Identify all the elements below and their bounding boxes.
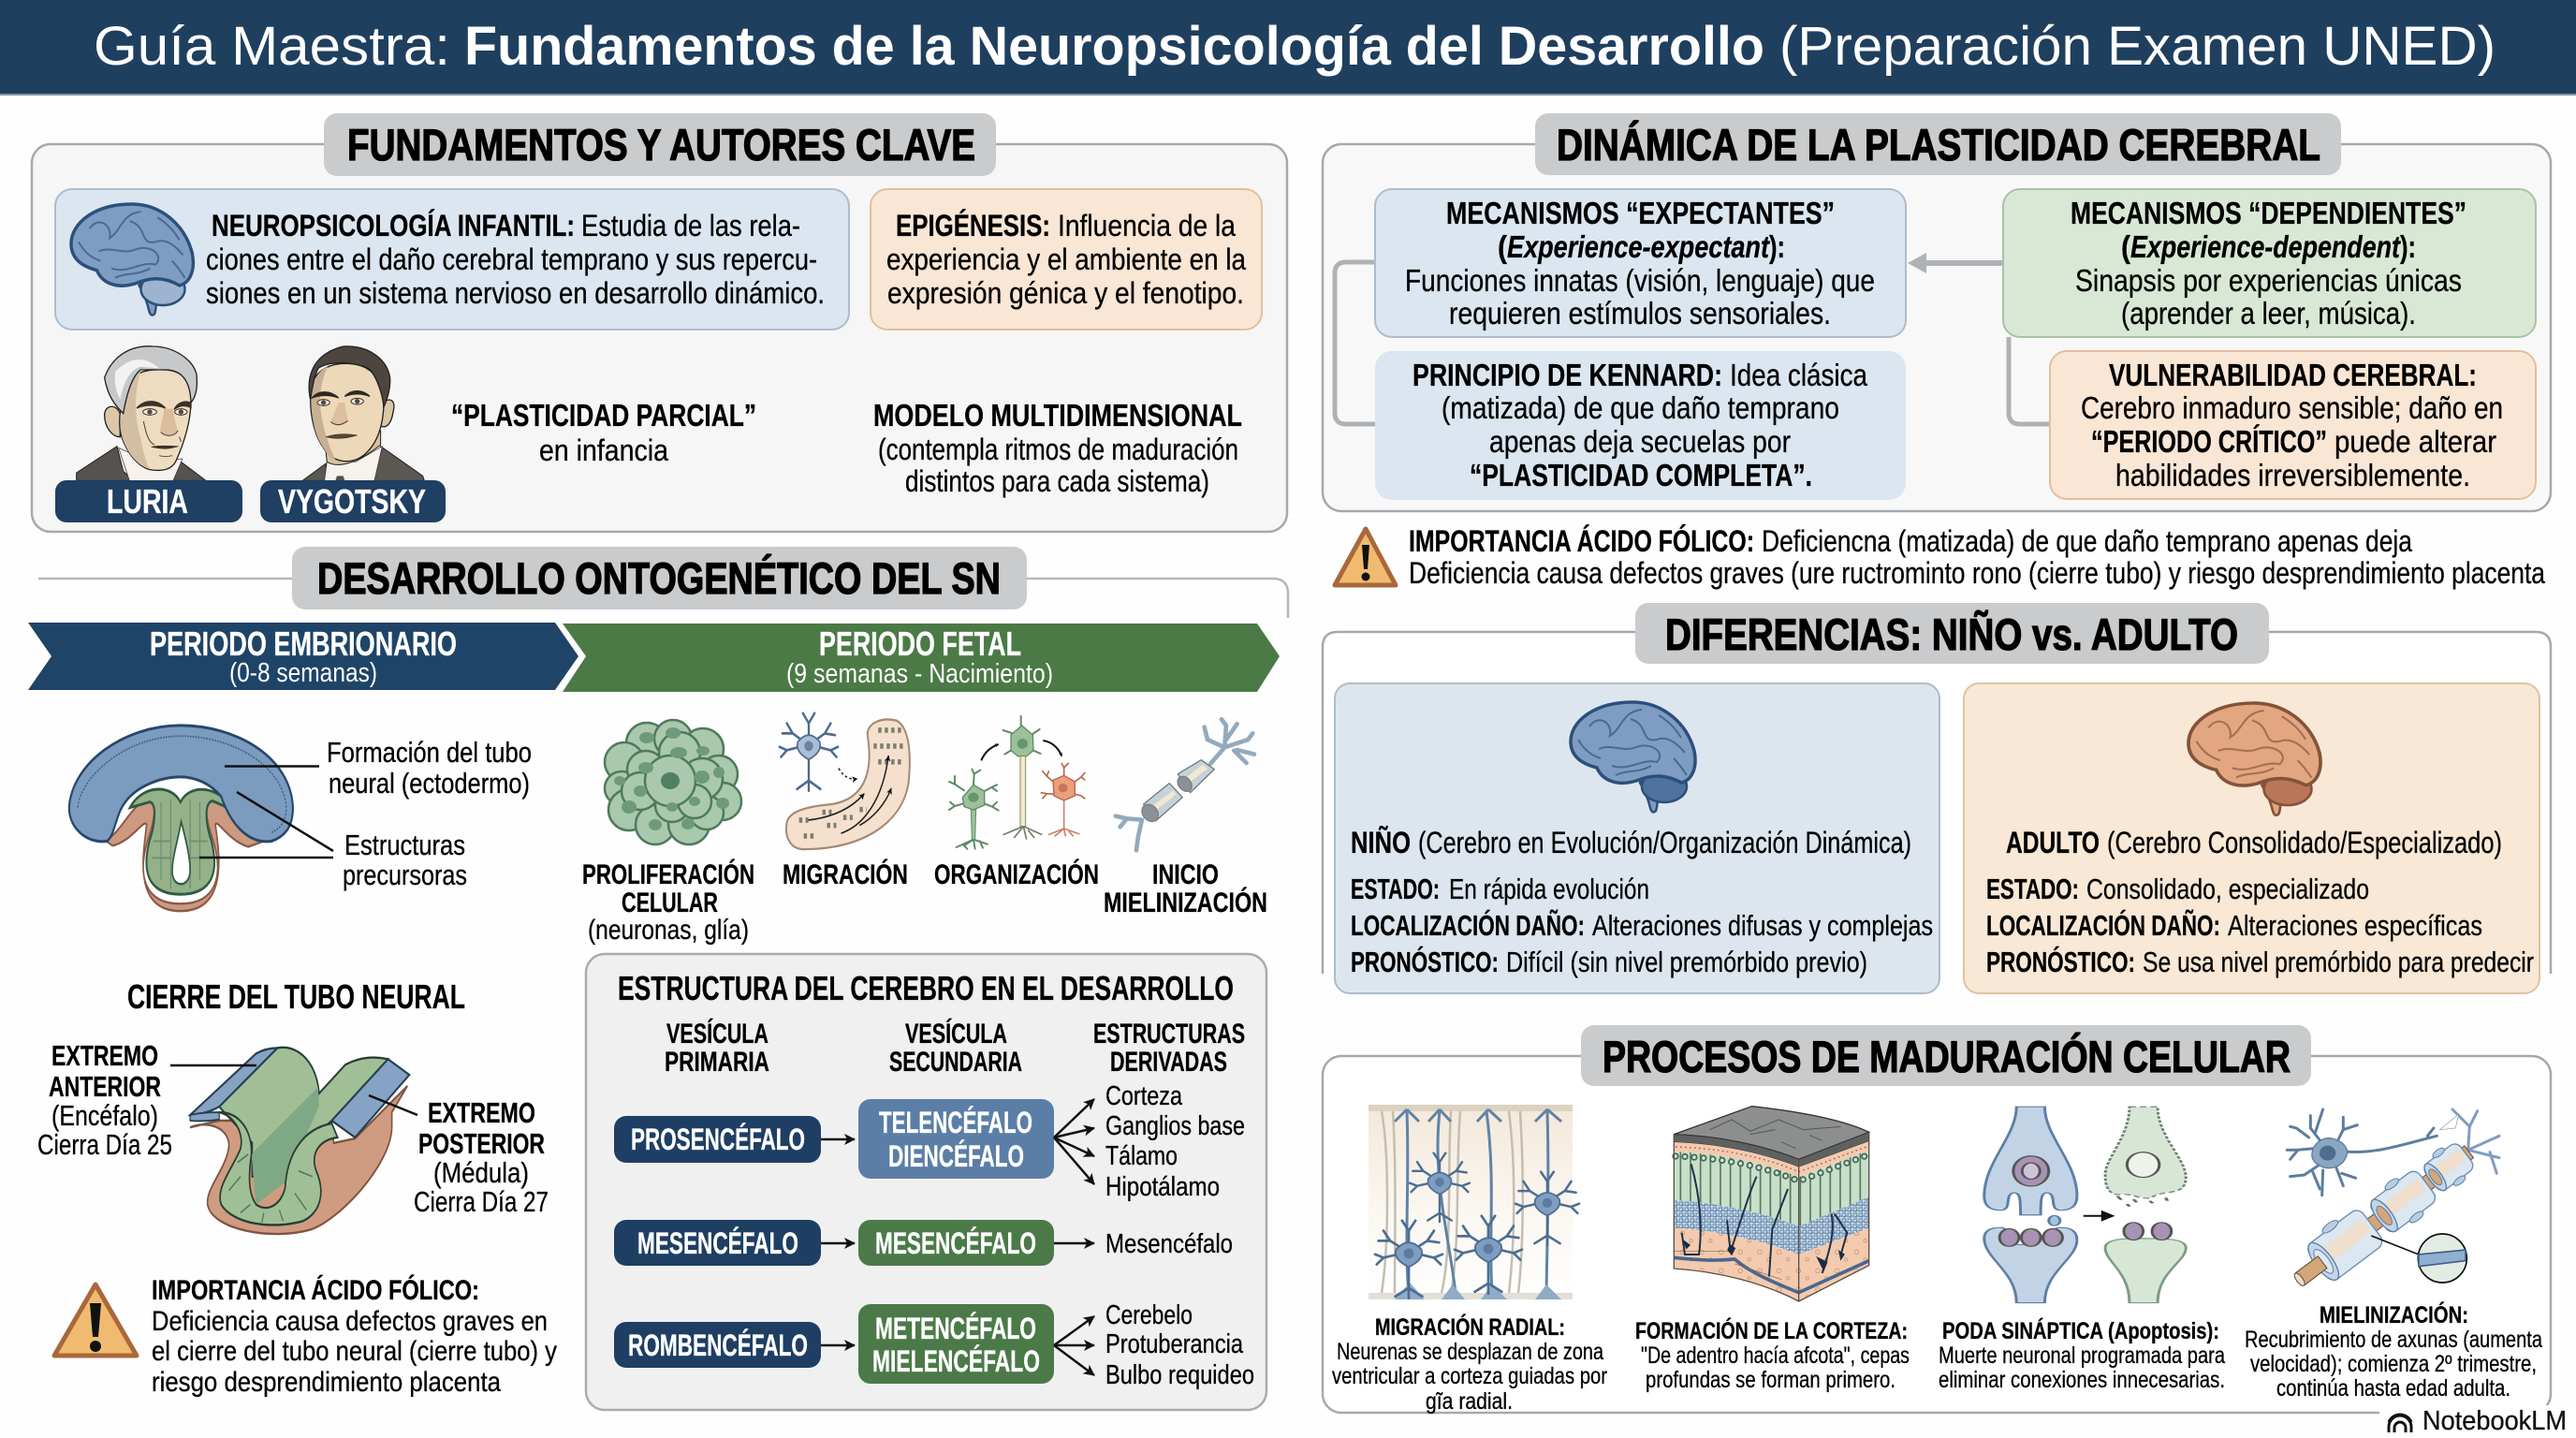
text: extremo anterior: ANTERIOR	[49, 1070, 161, 1103]
text: extremo posterior: (Médula)	[433, 1156, 529, 1189]
text: migración radial: ventricular a corteza guiadas por	[1332, 1363, 1607, 1389]
text: migración radial: MIGRACIÓN RADIAL:	[1375, 1313, 1565, 1341]
row: mesencéfalo: MESENCÉFALO	[875, 1226, 1036, 1260]
connector: dependientes a vulnerabilidad	[2009, 337, 2050, 424]
card: principio de Kennard: Idea clásica	[1730, 358, 1868, 392]
heading: diferencias: DIFERENCIAS: NIÑO vs. ADULTO	[1665, 609, 2238, 659]
card: mecanismos expectantes: Funciones innatas (visión, lenguaje) que	[1405, 263, 1875, 298]
column headers: VESÍCULA	[666, 1018, 768, 1049]
connector: bracket izquierdo	[1335, 262, 1375, 424]
card: epigénesis: experiencia y el ambiente en la	[886, 242, 1246, 276]
panel: estructura del cerebro en el desarrollo	[586, 954, 1266, 1410]
text: extremo posterior	[414, 1096, 549, 1218]
text: plasticidad parcial	[451, 398, 756, 467]
illustration: formación del tubo neural	[69, 726, 333, 911]
icon: brain niño	[1571, 702, 1695, 812]
text: niño	[1351, 826, 1933, 978]
text: adulto: ESTADO:	[1986, 873, 2079, 905]
card: mecanismos dependientes: (	[2121, 229, 2130, 264]
panel: procesos de maduración celular	[1323, 1025, 2551, 1415]
text: formación del tubo neural: Formación del tubo	[327, 736, 532, 769]
text: migración radial: Neurenas se desplazan de zona	[1337, 1339, 1603, 1365]
row: mesencéfalo: Mesencéfalo	[1105, 1229, 1233, 1259]
column headers: SECUNDARIA	[889, 1047, 1022, 1078]
illustration: mielinización	[2280, 1109, 2499, 1300]
text: definición neuropsicología infantil: NEUROPSICOLOGÍA INFANTIL:	[212, 209, 575, 242]
row: prosencéfalo: Ganglios base	[1105, 1111, 1245, 1141]
card: vulnerabilidad cerebral: Cerebro inmaduro sensible; daño en	[2081, 390, 2503, 425]
card: mecanismos expectantes: requieren estímulos sensoriales.	[1449, 296, 1831, 330]
text: formación de la corteza: FORMACIÓN DE LA CORTEZA:	[1635, 1316, 1908, 1344]
row: prosencéfalo: Hipotálamo	[1105, 1172, 1220, 1202]
row: prosencéfalo: DIENCÉFALO	[888, 1139, 1024, 1173]
panel: dinámica de la plasticidad cerebral	[1323, 113, 2551, 511]
card: principio de Kennard: PRINCIPIO DE KENNARD:	[1412, 358, 1722, 392]
text: extremo posterior: EXTREMO	[428, 1096, 535, 1129]
text: poda sináptica: PODA SINÁPTICA (Apoptosis):	[1942, 1317, 2219, 1344]
card: mecanismos dependientes: Sinapsis por experiencias únicas	[2075, 263, 2462, 298]
card: mecanismos dependientes: ):	[2400, 229, 2416, 264]
heading: cierre del tubo neural: CIERRE DEL TUBO NEURAL	[127, 977, 465, 1016]
text: formación de la corteza: "De adentro hacía afcota", cepas	[1641, 1343, 1910, 1369]
illustration: migración radial	[1368, 1105, 1579, 1299]
text: definición neuropsicología infantil: Estudia de las rela-	[581, 209, 800, 242]
heading: procesos: PROCESOS DE MADURACIÓN CELULAR	[1603, 1032, 2291, 1081]
row: rombencéfalo	[614, 1300, 1254, 1390]
label: Luria: LURIA	[107, 482, 188, 521]
row: mesencéfalo: MESENCÉFALO	[637, 1226, 798, 1260]
card: vulnerabilidad cerebral: “PERIODO CRÍTICO”	[2091, 424, 2327, 459]
icon: migración	[780, 713, 910, 849]
row: rombencéfalo: ROMBENCÉFALO	[628, 1328, 808, 1362]
text: formación de la corteza	[1635, 1316, 1910, 1393]
portrait: Vygotsky	[302, 346, 424, 480]
column headers	[665, 1018, 1245, 1078]
label: Luria	[55, 480, 242, 522]
text: niño: Difícil (sin nivel premórbido previo)	[1506, 946, 1867, 978]
labels: procesos del periodo fetal: CELULAR	[622, 888, 718, 918]
text: niño: PRONÓSTICO:	[1351, 945, 1499, 978]
text: modelo multidimensional: (contempla ritmos de maduración	[878, 433, 1238, 466]
text: adulto: ADULTO	[2006, 826, 2100, 859]
title banner: (Preparación Examen UNED)	[1779, 16, 2496, 77]
row: prosencéfalo: PROSENCÉFALO	[631, 1123, 805, 1156]
portrait: Luria	[77, 346, 206, 480]
panel: desarrollo ontogenético	[28, 547, 1288, 1410]
card: mecanismos dependientes: (aprender a leer, música).	[2121, 296, 2416, 330]
text: poda sináptica: Muerte neuronal programada para	[1939, 1343, 2225, 1369]
row: rombencéfalo: METENCÉFALO	[875, 1312, 1036, 1345]
card: principio de Kennard: “PLASTICIDAD COMPLETA”.	[1470, 458, 1812, 492]
title banner: Fundamentos de la Neuropsicología del Desarrollo	[464, 16, 1764, 77]
row: prosencéfalo: Tálamo	[1105, 1141, 1178, 1171]
card: epigénesis: Influencia de la	[1058, 209, 1236, 242]
title banner	[0, 0, 2576, 95]
heading: dinámica	[1535, 113, 2341, 175]
banner: periodo fetal: PERIODO FETAL	[819, 624, 1021, 663]
text: estructuras precursoras: precursoras	[343, 858, 467, 891]
card: principio de Kennard: (matizada) de que daño temprano	[1442, 390, 1839, 425]
card: mecanismos expectantes: (	[1498, 229, 1507, 264]
callout: importancia ácido fólico (derecha)	[1335, 524, 2545, 590]
text: definición neuropsicología infantil: ciones entre el daño cerebral temprano y sus repercu-	[206, 242, 817, 276]
heading: fundamentos	[324, 113, 996, 176]
callout: importancia ácido fólico (derecha): IMPORTANCIA ÁCIDO FÓLICO:	[1409, 524, 1754, 558]
banner: periodo embrionario: (0-8 semanas)	[229, 658, 377, 688]
text: formación del tubo neural: neural (ectodermo)	[329, 767, 530, 800]
illustration: formación de la corteza	[1674, 1107, 1869, 1301]
icon: warning triangle	[54, 1284, 137, 1356]
text: niño: LOCALIZACIÓN DAÑO:	[1351, 908, 1585, 942]
card: mecanismos dependientes: MECANISMOS “DEPENDIENTES”	[2071, 196, 2466, 230]
text: extremo anterior	[37, 1039, 172, 1161]
text: modelo multidimensional: MODELO MULTIDIMENSIONAL	[873, 398, 1242, 433]
labels: procesos del periodo fetal: PROLIFERACIÓN	[582, 858, 754, 890]
card: principio de Kennard	[1375, 351, 1906, 500]
text: niño: ESTADO:	[1351, 873, 1440, 905]
card: epigénesis	[871, 189, 1262, 330]
icon: blue brain	[71, 204, 193, 315]
text: plasticidad parcial: “PLASTICIDAD PARCIAL”	[451, 398, 756, 433]
text: importancia ácido fólico (izquierda): riesgo desprendimiento placenta	[152, 1367, 501, 1398]
column headers: PRIMARIA	[665, 1047, 769, 1078]
row: prosencéfalo	[614, 1081, 1245, 1202]
heading: desarrollo ontogenético	[292, 547, 1027, 609]
labels: procesos del periodo fetal: INICIO	[1152, 859, 1219, 890]
text: poda sináptica	[1939, 1317, 2225, 1393]
text: estructuras precursoras: Estructuras	[344, 829, 465, 861]
column headers: ESTRUCTURAS	[1093, 1019, 1245, 1049]
heading: dinámica: DINÁMICA DE LA PLASTICIDAD CEREBRAL	[1557, 120, 2320, 169]
heading: estructura del cerebro: ESTRUCTURA DEL CEREBRO EN EL DESARROLLO	[618, 969, 1234, 1007]
labels: procesos del periodo fetal: (neuronas, glía)	[588, 915, 749, 946]
text: importancia ácido fólico (izquierda): IMPORTANCIA ÁCIDO FÓLICO:	[152, 1274, 479, 1306]
text: migración radial	[1332, 1313, 1607, 1415]
text: mielinización: continúa hasta edad adulta.	[2276, 1375, 2510, 1401]
row: rombencéfalo: Cerebelo	[1105, 1300, 1193, 1330]
text: mielinización	[2245, 1300, 2542, 1401]
title banner: Guía Maestra:	[94, 16, 450, 77]
column headers: VESÍCULA	[905, 1018, 1007, 1049]
label: Vygotsky: VYGOTSKY	[278, 482, 426, 521]
card: epigénesis: EPIGÉNESIS:	[896, 209, 1050, 242]
text: importancia ácido fólico (izquierda): el cierre del tubo neural (cierre tubo) y	[152, 1336, 557, 1367]
card: mecanismos expectantes: MECANISMOS “EXPECTANTES”	[1446, 196, 1835, 230]
icon: organización	[949, 716, 1085, 849]
row: rombencéfalo: Protuberancia	[1105, 1329, 1244, 1359]
text: modelo multidimensional	[873, 398, 1242, 498]
text: estructuras precursoras	[343, 829, 467, 891]
text: extremo anterior: EXTREMO	[51, 1039, 158, 1072]
banner: periodo embrionario: PERIODO EMBRIONARIO	[150, 624, 457, 663]
illustration: poda sináptica	[1984, 1107, 2186, 1303]
card: mecanismos dependientes: Experience-dependent	[2130, 229, 2402, 264]
text: niño: En rápida evolución	[1449, 873, 1649, 905]
illustration: cierre del tubo neural	[170, 1048, 417, 1234]
text: niño: (Cerebro en Evolución/Organización Dinámica)	[1418, 826, 1911, 859]
text: extremo posterior: Cierra Día 27	[414, 1185, 549, 1218]
heading: procesos	[1581, 1025, 2311, 1086]
card: vulnerabilidad cerebral: puede alterar	[2334, 424, 2496, 459]
labels: procesos del periodo fetal: MIGRACIÓN	[783, 858, 908, 890]
text: plasticidad parcial: en infancia	[539, 433, 668, 467]
card: vulnerabilidad cerebral: habilidades irreversiblemente.	[2115, 458, 2470, 492]
row: mesencéfalo	[614, 1220, 1233, 1266]
text: extremo posterior: POSTERIOR	[418, 1127, 545, 1160]
icon: warning triangle	[1335, 529, 1396, 585]
callout: importancia ácido fólico (derecha): Deficiencna (matizada) de que daño temprano apenas deja	[1762, 524, 2412, 558]
row: rombencéfalo: MIELENCÉFALO	[872, 1344, 1040, 1378]
heading: diferencias	[1635, 603, 2269, 664]
text: extremo anterior: Cierra Día 25	[37, 1128, 172, 1161]
card: adulto	[1964, 683, 2539, 993]
text: extremo anterior: (Encéfalo)	[51, 1099, 158, 1132]
column headers: DERIVADAS	[1110, 1047, 1227, 1078]
card: vulnerabilidad cerebral	[2050, 351, 2536, 499]
labels: procesos del periodo fetal: ORGANIZACIÓN	[934, 858, 1099, 890]
text: adulto: Consolidado, especializado	[2086, 873, 2369, 905]
heading: desarrollo ontogenético: DESARROLLO ONTOGENÉTICO DEL SN	[317, 553, 1001, 603]
banner: periodo fetal	[563, 624, 1280, 692]
banner: periodo embrionario	[28, 623, 578, 690]
row: rombencéfalo: Bulbo requideo	[1105, 1360, 1254, 1390]
panel: fundamentos y autores clave	[32, 113, 1287, 532]
text: mielinización: MIELINIZACIÓN:	[2320, 1300, 2468, 1328]
icon: proliferación celular	[605, 720, 741, 844]
card: niño	[1335, 683, 1939, 993]
card: vulnerabilidad cerebral: VULNERABILIDAD CEREBRAL:	[2109, 358, 2477, 392]
labels: procesos del periodo fetal: MIELINIZACIÓN	[1104, 887, 1267, 918]
text: migración radial: gĩa radial.	[1426, 1388, 1513, 1415]
text: adulto: LOCALIZACIÓN DAÑO:	[1986, 908, 2220, 942]
text: importancia ácido fólico (izquierda)	[152, 1274, 557, 1398]
row: prosencéfalo: TELENCÉFALO	[879, 1106, 1032, 1139]
text: adulto: Alteraciones específicas	[2228, 909, 2482, 942]
text: importancia ácido fólico (izquierda): Deficiencia causa defectos graves en	[152, 1306, 548, 1337]
text: formación de la corteza: profundas se forman primero.	[1646, 1367, 1895, 1393]
card: principio de Kennard: apenas deja secuelas por	[1489, 424, 1791, 459]
text: definición neuropsicología infantil: siones en un sistema nervioso en desarrollo dinámico.	[206, 276, 825, 310]
icon: inicio mielinización	[1116, 719, 1254, 850]
banner: periodo fetal: (9 semanas - Nacimiento)	[786, 659, 1053, 689]
card: mecanismos dependientes	[2003, 189, 2536, 337]
card: mecanismos expectantes	[1375, 189, 1906, 337]
arrow: dependientes a expectantes	[1908, 253, 2003, 273]
row: prosencéfalo: Corteza	[1105, 1081, 1183, 1111]
card: mecanismos expectantes: ):	[1769, 229, 1785, 264]
text: niño: Alteraciones difusas y complejas	[1592, 909, 1933, 942]
icon: brain adulto	[2188, 703, 2320, 815]
card: mecanismos expectantes: Experience-expectant	[1507, 229, 1771, 264]
heading: fundamentos: FUNDAMENTOS Y AUTORES CLAVE	[347, 120, 975, 169]
text: formación del tubo neural	[327, 736, 532, 800]
text: poda sináptica: eliminar conexiones innecesarias.	[1939, 1367, 2225, 1393]
panel: diferencias niño vs adulto	[1323, 603, 2551, 993]
labels: procesos del periodo fetal	[582, 858, 1267, 946]
text: modelo multidimensional: distintos para cada sistema)	[905, 464, 1209, 498]
watermark: NotebookLM: NotebookLM	[2422, 1406, 2567, 1436]
card: neuropsicología infantil	[55, 189, 849, 330]
text: adulto	[1986, 826, 2534, 978]
text: adulto: PRONÓSTICO:	[1986, 945, 2135, 978]
text: definición neuropsicología infantil	[206, 209, 825, 310]
card: epigénesis: expresión génica y el fenotipo.	[887, 276, 1244, 310]
text: niño: NIÑO	[1351, 826, 1411, 859]
